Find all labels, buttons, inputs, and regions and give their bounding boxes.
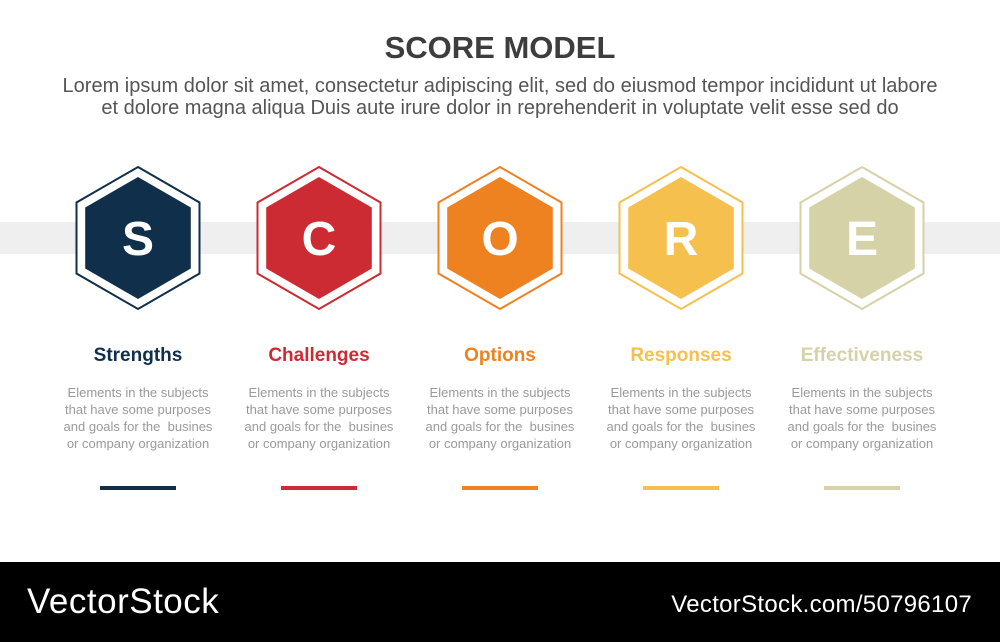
text C: and goals for the busines: [245, 419, 393, 434]
line C: [281, 486, 357, 490]
text E: that have some purposes: [789, 402, 935, 417]
hexagon row: [0, 166, 1000, 310]
subtitle text: Lorem ipsum dolor sit amet, consectetur adipiscing elit, sed do eiusmod tempor incididunt ut labore: [63, 75, 937, 97]
hex R: [620, 167, 742, 309]
hex C: [258, 167, 380, 309]
heading: Responses: Responses: [630, 345, 732, 366]
text R: or company organization: [610, 436, 752, 451]
heading: Challenges: Challenges: [268, 345, 370, 366]
text O: and goals for the busines: [426, 419, 574, 434]
text R: that have some purposes: [608, 402, 754, 417]
title: SCORE MODEL: [385, 30, 615, 65]
subtitle text: [63, 75, 937, 119]
hex E: E: [846, 213, 878, 266]
hex O: [438, 167, 562, 309]
text R: [607, 385, 755, 451]
hex O: O: [481, 213, 519, 266]
text R: and goals for the busines: [607, 419, 755, 434]
text C: [245, 385, 393, 451]
text C: Elements in the subjects: [249, 385, 389, 400]
text E: or company organization: [791, 436, 933, 451]
text C: or company organization: [248, 436, 390, 451]
footer bar: [0, 562, 1000, 642]
hex C: C: [302, 213, 336, 266]
text E: and goals for the busines: [788, 419, 936, 434]
text E: Elements in the subjects: [792, 385, 932, 400]
heading: Effectiveness: Effectiveness: [801, 345, 923, 366]
text S: or company organization: [67, 436, 209, 451]
subtitle text: et dolore magna aliqua Duis aute irure dolor in reprehenderit in voluptate velit esse sed do: [101, 97, 899, 119]
text R: Elements in the subjects: [611, 385, 751, 400]
footer logo: VectorStock: [27, 582, 219, 621]
text S: [64, 385, 212, 451]
heading: Options: Options: [464, 345, 536, 366]
footer url: VectorStock.com/50796107: [671, 591, 972, 618]
heading: Strengths: Strengths: [94, 345, 182, 366]
text O: or company organization: [429, 436, 571, 451]
text O: [426, 385, 574, 451]
line R: [643, 486, 719, 490]
line S: [100, 486, 176, 490]
hex S: [76, 167, 200, 309]
text C: that have some purposes: [246, 402, 392, 417]
hex S: S: [122, 213, 154, 266]
text S: and goals for the busines: [64, 419, 212, 434]
text E: [788, 385, 936, 451]
hex E: [800, 167, 924, 309]
line E: [824, 486, 900, 490]
line O: [462, 486, 538, 490]
text O: Elements in the subjects: [430, 385, 570, 400]
text S: that have some purposes: [65, 402, 211, 417]
text O: that have some purposes: [427, 402, 573, 417]
hex R: R: [664, 213, 698, 266]
text S: Elements in the subjects: [68, 385, 208, 400]
